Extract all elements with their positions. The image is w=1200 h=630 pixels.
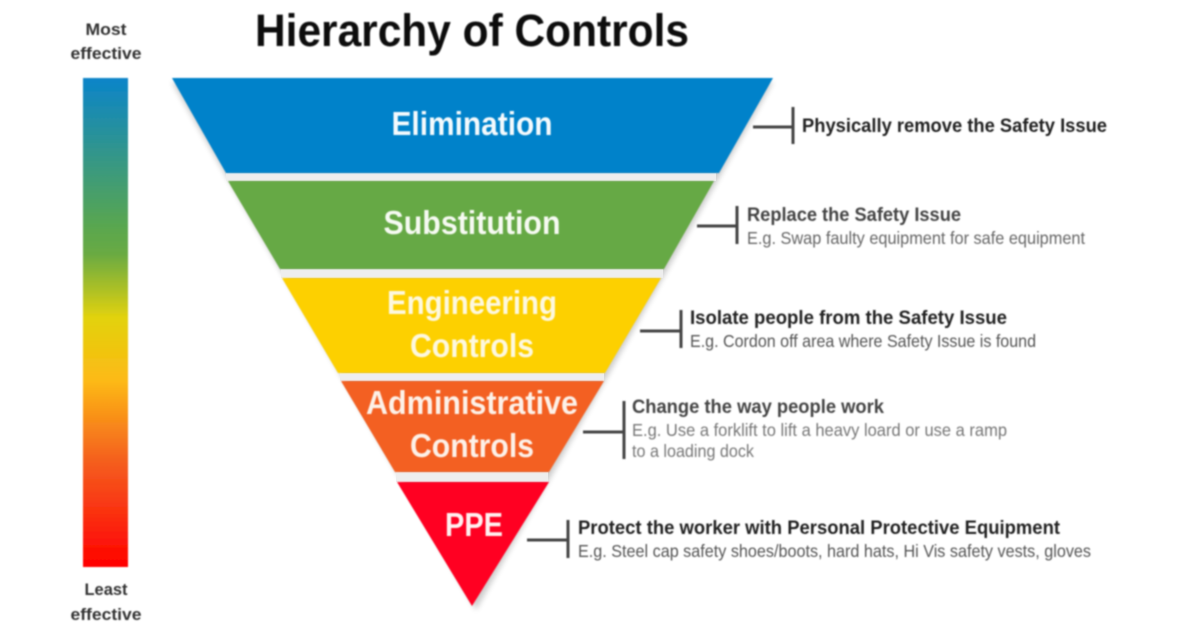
- callout: substitution: E.g. Swap faulty equipment for safe equipment: [747, 228, 1085, 248]
- tier: elimination: [172, 78, 773, 181]
- callout: elimination: [753, 107, 1107, 144]
- tier: administrative controls: [341, 381, 604, 482]
- callouts: [527, 107, 1107, 561]
- label: most effective: Most: [86, 20, 127, 39]
- title: Hierarchy of Controls: [255, 5, 689, 56]
- label: most effective: effective: [70, 44, 142, 63]
- tier: elimination: Elimination: [392, 105, 552, 142]
- tier: substitution: Substitution: [384, 204, 560, 241]
- callout: substitution: Replace the Safety Issue: [747, 204, 961, 226]
- tier: engineering controls: [282, 278, 661, 381]
- tier: substitution: [228, 181, 714, 278]
- tier: administrative controls: Controls: [410, 427, 534, 464]
- tier: PPE: [397, 482, 549, 606]
- label: least effective: Least: [84, 580, 128, 599]
- callout: elimination: Physically remove the Safety Issue: [802, 115, 1107, 137]
- label: least effective: effective: [70, 605, 142, 624]
- callout: administrative controls: Change the way people work: [632, 396, 884, 418]
- callout: substitution: [697, 204, 1085, 248]
- tier: engineering controls: Engineering: [387, 284, 557, 321]
- tier: PPE: PPE: [445, 506, 503, 543]
- label: least effective: [70, 580, 142, 624]
- callout: PPE: Protect the worker with Personal Protective Equipment: [578, 517, 1060, 539]
- callout: PPE: E.g. Steel cap safety shoes/boots, hard hats, Hi Vis safety vests, gloves: [578, 541, 1091, 561]
- callout: administrative controls: E.g. Use a forklift to lift a heavy loard or use a ramp: [632, 420, 1007, 440]
- callout: engineering controls: Isolate people from the Safety Issue: [690, 307, 1007, 329]
- label: most effective: [70, 20, 142, 63]
- tier: administrative controls: Administrative: [366, 384, 578, 421]
- callout: PPE: [527, 517, 1091, 561]
- inverted pyramid: [172, 78, 773, 606]
- callout: engineering controls: E.g. Cordon off area where Safety Issue is found: [690, 331, 1036, 351]
- callout: administrative controls: to a loading dock: [632, 441, 754, 461]
- callout: administrative controls: [583, 396, 1007, 461]
- pyramid shadow: [172, 82, 773, 610]
- gradient bar: [83, 78, 128, 567]
- callout: engineering controls: [640, 307, 1036, 351]
- effectiveness scale: [70, 20, 142, 624]
- tier: engineering controls: Controls: [410, 327, 534, 364]
